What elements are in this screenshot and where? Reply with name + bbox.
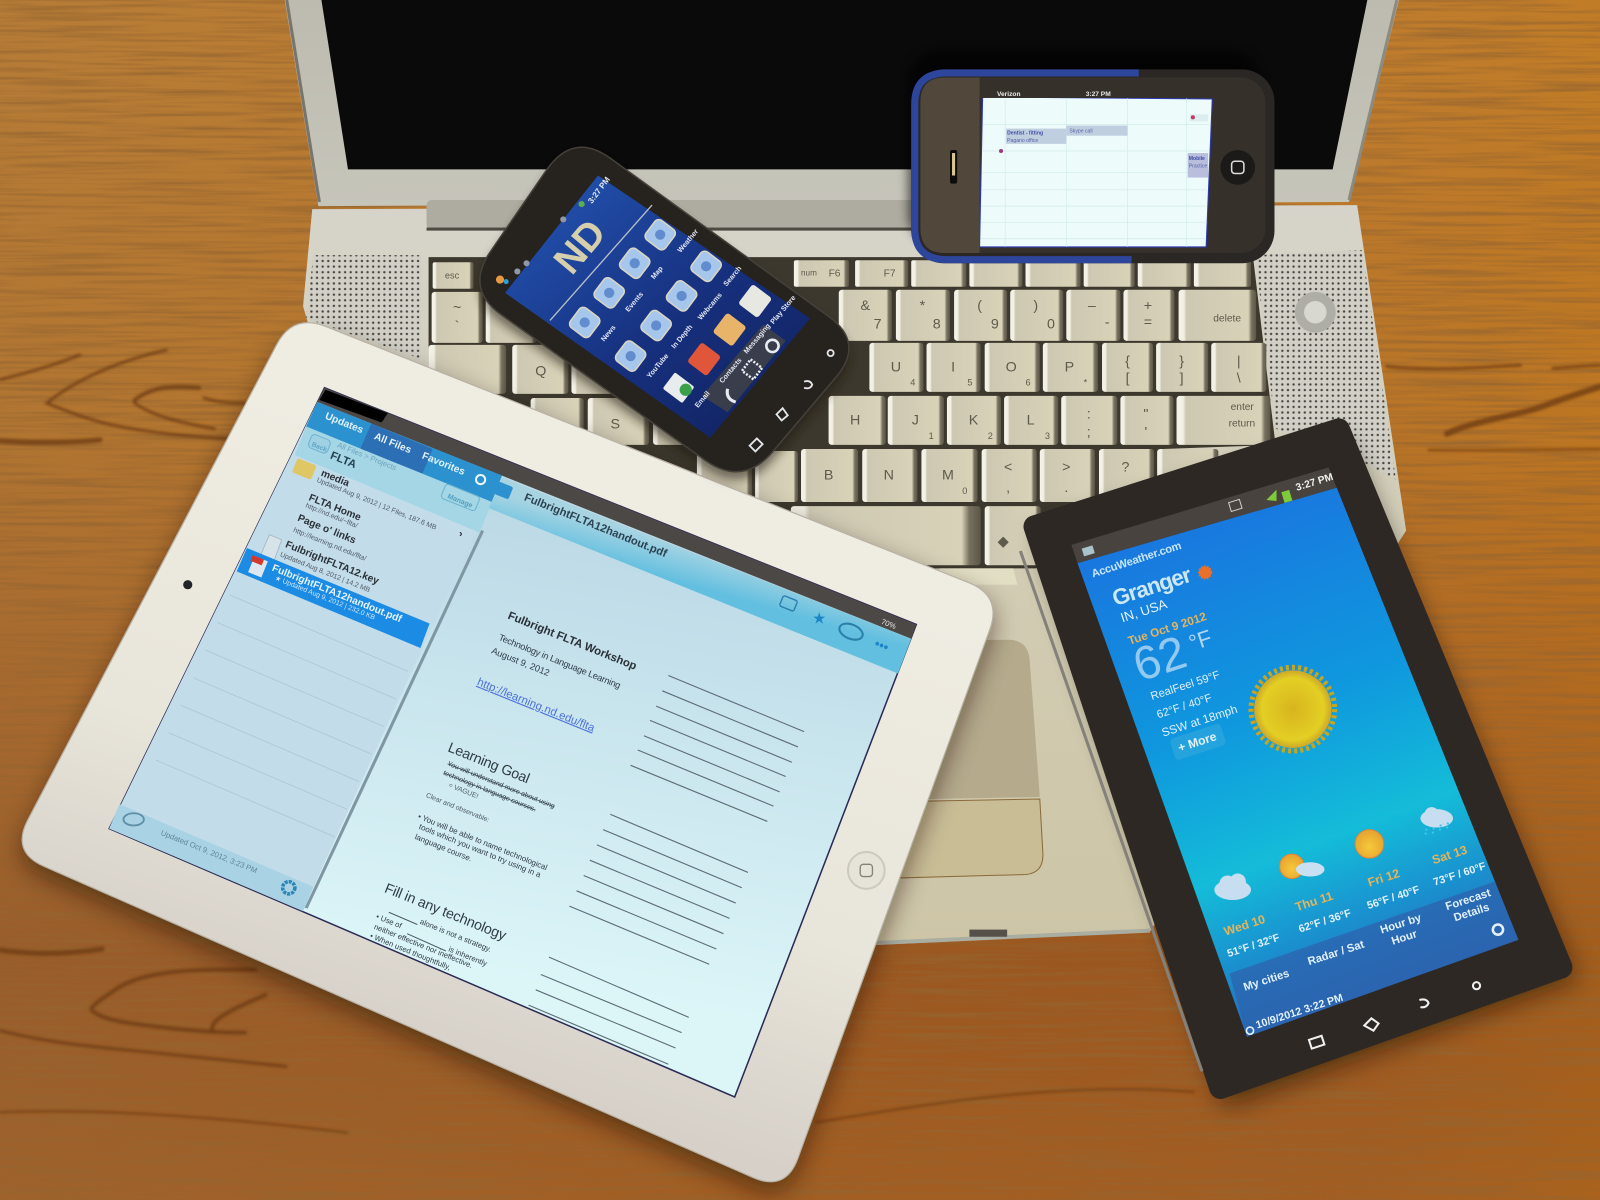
- number key row: –: [1088, 298, 1096, 314]
- file list: FulbrightFLTA12.key: [284, 540, 381, 587]
- bottom letter key row: ?: [1122, 459, 1130, 475]
- number key row: [432, 290, 1256, 343]
- app icons: In Depth: [670, 323, 694, 350]
- document text: Technology in Language Learning: [497, 632, 622, 691]
- bottom menu labels: Radar / Sat: [1306, 939, 1366, 968]
- bottom letter key row: >: [1062, 459, 1070, 475]
- handout writing lines: [529, 676, 804, 1064]
- tab bar: Updates: [323, 411, 365, 436]
- forecast: Sat 13: [1430, 843, 1469, 867]
- current conditions: AccuWeather.com: [1090, 540, 1183, 580]
- Friday sun: [1355, 830, 1384, 858]
- Saturday rain cloud: [1420, 807, 1453, 835]
- status bar: Verizon: [997, 91, 1021, 98]
- ND logo: ND: [546, 212, 615, 282]
- status icons: [496, 175, 612, 284]
- forecast: [1214, 807, 1488, 960]
- number key row: ~: [453, 300, 461, 316]
- current conditions: 62°F / 40°F: [1155, 692, 1213, 721]
- forecast: 62°F / 36°F: [1297, 907, 1353, 936]
- function key row: esc: [445, 271, 460, 281]
- document text: [369, 610, 638, 972]
- document text: August 9, 2012: [490, 646, 551, 678]
- laptop front notch: [969, 930, 1007, 937]
- bottom menu labels: Forecast: [1444, 887, 1493, 913]
- file list: Updated Aug 8, 2012 | 14.2 MB: [279, 551, 371, 594]
- function key row: num: [801, 269, 817, 278]
- folder header: [295, 427, 492, 533]
- app icons: Webcams: [696, 291, 724, 322]
- folder header: FLTA: [328, 450, 358, 471]
- calendar screen: [980, 90, 1212, 247]
- number key row: ): [1033, 298, 1038, 314]
- Android phone shadow: [480, 155, 849, 480]
- calendar events: Practice: [1189, 163, 1207, 169]
- top letter key row: [: [1126, 371, 1130, 387]
- top letter key row: I: [951, 359, 955, 375]
- phone screen: [505, 176, 810, 438]
- home letter key row: enter: [1231, 402, 1254, 413]
- document toolbar: FulbrightFLTA12handout.pdf: [522, 492, 669, 560]
- function key row: [433, 260, 1251, 289]
- forecast: 56°F / 40°F: [1366, 884, 1421, 912]
- Samsung tablet shadow: [1036, 439, 1577, 1107]
- earpiece: [950, 150, 957, 184]
- function key row: F6: [829, 269, 841, 280]
- number key row: =: [1144, 315, 1152, 331]
- document text: is inherently: [447, 945, 489, 968]
- case: [911, 69, 1274, 263]
- calendar grid: [981, 98, 1209, 247]
- forecast: 73°F / 60°F: [1432, 860, 1488, 889]
- app icons: Map: [649, 264, 665, 281]
- number key row: &: [861, 298, 871, 314]
- status bar: [317, 388, 916, 639]
- home letter key row: S: [611, 417, 620, 433]
- app icons: YouTube: [645, 352, 670, 380]
- tablet status strip: [1071, 467, 1337, 563]
- bottom letter key row: <: [1004, 459, 1012, 475]
- wallpaper divider: [550, 205, 652, 320]
- pane footer: [109, 804, 313, 911]
- tab bar: All Files: [372, 431, 413, 456]
- iPad home button: [848, 852, 885, 889]
- home letter key row: 2: [988, 431, 993, 441]
- trackpad: [878, 640, 1040, 800]
- folder header: Back: [310, 441, 328, 454]
- large sun: [1251, 667, 1335, 751]
- document text: Fulbright FLTA Workshop: [506, 610, 638, 673]
- top letter key row: |: [1237, 353, 1241, 369]
- laptop lid: [285, 0, 1399, 206]
- bottom menu labels: My cities: [1242, 968, 1291, 994]
- file list: http://nd.edu/~flta/: [304, 503, 359, 530]
- empty list rows: [156, 595, 408, 837]
- top letter key row: U: [891, 359, 901, 375]
- top letter key row: Q: [535, 364, 546, 380]
- dock band: [702, 324, 786, 412]
- document text: You will understand more about using: [446, 761, 556, 810]
- current conditions: IN, USA: [1119, 596, 1169, 625]
- current conditions: + More: [1176, 729, 1219, 755]
- file list: http://learning.nd.edu/flta/: [292, 527, 367, 563]
- left file pane: [109, 402, 502, 911]
- space bar row: ◆: [998, 534, 1009, 550]
- forecast: Thu 11: [1294, 889, 1335, 914]
- current conditions: °F: [1186, 625, 1215, 656]
- home letter key row: 3: [1045, 431, 1050, 441]
- document text: neither effective nor ineffective.: [373, 922, 474, 970]
- home letter key row: 1: [929, 431, 934, 441]
- document toolbar: [489, 478, 911, 673]
- app icons: Search: [722, 265, 743, 288]
- current conditions: RealFeel 59°F: [1149, 669, 1221, 703]
- app icons: News: [599, 324, 618, 343]
- pane divider: [306, 531, 483, 908]
- iPad screen: [109, 388, 916, 1097]
- number key row: +: [1144, 298, 1152, 314]
- home button: [1220, 150, 1255, 185]
- weather screen: [1078, 488, 1518, 1037]
- app icons: Email: [693, 390, 712, 409]
- left speaker grille: [306, 255, 421, 359]
- document toolbar: •••: [872, 636, 891, 655]
- tab bar: Favorites: [420, 451, 467, 478]
- file list: media: [319, 468, 351, 489]
- iPhone shadow: [908, 51, 1260, 245]
- document text: • You will be able to name technological: [417, 812, 549, 872]
- power button: [1295, 292, 1336, 333]
- calendar events: [999, 114, 1208, 178]
- forecast: Fri 12: [1366, 866, 1402, 890]
- app icons: Weather: [676, 228, 700, 254]
- document text: • When used thoughtfully,: [369, 931, 452, 972]
- document text: tools which you want to try using in a: [418, 822, 543, 880]
- app icons: Messaging: [742, 322, 772, 355]
- home letter key row: ;: [1087, 425, 1091, 441]
- iPad shadow: [22, 337, 993, 1192]
- document text: http://learning.nd.edu/flta: [475, 676, 597, 735]
- home letter key row: L: [1027, 412, 1035, 428]
- document text: Fill in any technology: [382, 881, 509, 944]
- laptop: [285, 0, 1406, 946]
- calendar events: Dentist - fitting: [1007, 131, 1043, 137]
- document text: Learning Goal: [445, 740, 532, 787]
- phone navigation keys: [750, 350, 834, 451]
- Wednesday cloud: [1214, 873, 1251, 900]
- pane footer: Updated Oct 9, 2012, 3:23 PM: [159, 828, 259, 875]
- palm rest highlight: [934, 568, 1017, 585]
- iPad camera: [183, 580, 192, 589]
- top letter key row: {: [1125, 353, 1130, 369]
- calendar events: Mobile: [1189, 156, 1205, 162]
- phone face: [920, 78, 1265, 253]
- current conditions: [1090, 540, 1239, 761]
- bottom menu labels: 10/9/2012 3:22 PM: [1254, 992, 1345, 1031]
- status bar: [982, 90, 1212, 98]
- number key row: 9: [991, 317, 999, 333]
- top letter key row: P: [1065, 359, 1074, 375]
- top letter key row: \: [1237, 371, 1241, 387]
- top letter key row: 6: [1026, 378, 1031, 388]
- document text: technology in language courses.: [442, 770, 537, 814]
- number key row: (: [977, 298, 982, 314]
- top letter key row: O: [1006, 359, 1017, 375]
- bottom letter key row: N: [884, 468, 894, 484]
- document toolbar: ★: [812, 610, 826, 627]
- file list: FLTA Home: [307, 493, 363, 524]
- hinge: [427, 200, 998, 230]
- current conditions: 62: [1127, 626, 1193, 691]
- calendar events: Pagano office: [1007, 138, 1038, 144]
- home letter key row: [531, 396, 1270, 445]
- app icons: Contacts: [718, 356, 744, 385]
- home letter key row: J: [912, 412, 919, 428]
- bottom menu labels: Hour by: [1379, 912, 1424, 937]
- right speaker grille: [1255, 250, 1396, 480]
- forecast: Wed 10: [1222, 912, 1267, 939]
- status icons: 3:27 PM: [586, 175, 612, 205]
- bottom letter key row: M: [942, 468, 954, 484]
- bottom letter key row: [697, 449, 1218, 502]
- file list: Page o' links: [296, 513, 358, 546]
- top letter key row: }: [1179, 353, 1184, 369]
- top letter key row: ]: [1180, 371, 1184, 387]
- bottom menu labels: Details: [1452, 901, 1491, 924]
- top letter key row: *: [1084, 378, 1088, 388]
- home letter key row: :: [1087, 406, 1091, 422]
- bottom menu labels: Hour: [1390, 928, 1419, 948]
- phone body: [480, 147, 849, 472]
- bottom menu labels: [1242, 887, 1503, 1034]
- document text: Clear and observable:: [425, 792, 490, 824]
- top letter key row: [429, 343, 1266, 394]
- tablet side edge: [1020, 551, 1202, 1071]
- app icons: Play Store: [769, 294, 797, 326]
- small sun icon: [1199, 566, 1211, 579]
- bottom navigation band: [1230, 882, 1518, 1037]
- space bar row: [791, 506, 1041, 565]
- app icons: Events: [624, 290, 645, 314]
- home letter key row: return: [1229, 419, 1255, 430]
- number key row: 7: [874, 317, 882, 333]
- number key row: -: [1105, 315, 1110, 331]
- tablet navigation keys: [1309, 982, 1480, 1049]
- home letter key row: K: [969, 412, 979, 428]
- folder header: All Files > Projects: [336, 440, 398, 472]
- tab bar: [306, 402, 502, 502]
- tablet status strip: 3:27 PM: [1295, 472, 1335, 494]
- iPad body: [22, 323, 993, 1182]
- home letter key row: ': [1145, 425, 1147, 441]
- status bar: 70%: [880, 617, 898, 631]
- number key row: *: [920, 298, 926, 314]
- document text: language course.: [414, 832, 473, 863]
- tablet body: [1035, 430, 1561, 1088]
- bottom letter key row: 0: [962, 486, 967, 496]
- Android smartphone: [480, 147, 849, 472]
- document text: alone is not a strategy.: [419, 917, 493, 954]
- dock icons: [727, 340, 779, 402]
- iPad tablet with file viewer: [22, 323, 993, 1182]
- keyboard: [429, 257, 1276, 568]
- trackpad button: [878, 799, 1043, 879]
- calendar events: Skype call: [1069, 129, 1093, 135]
- laptop base: [303, 205, 1406, 946]
- iPhone in blue case: [911, 69, 1274, 263]
- selected file row: [237, 548, 430, 648]
- file list: ›: [459, 529, 463, 540]
- top letter key row: 5: [967, 378, 972, 388]
- selected file row: FulbrightFLTA12handout.pdf: [270, 563, 404, 625]
- top letter key row: 4: [910, 378, 915, 388]
- app icons: [568, 218, 797, 409]
- document text: = VAGUE!: [447, 782, 479, 800]
- number key row: `: [455, 319, 460, 335]
- bottom letter key row: B: [824, 468, 833, 484]
- bottom letter key row: ,: [1006, 480, 1010, 496]
- file list: [260, 458, 480, 594]
- Thursday sun and cloud: [1280, 854, 1324, 879]
- current conditions: Tue Oct 9 2012: [1127, 610, 1209, 648]
- home letter key row: H: [850, 412, 860, 428]
- forecast: 51°F / 32°F: [1226, 932, 1282, 960]
- selected file row: ★ Updated Aug 9, 2012 | 232.0 KB: [274, 574, 377, 622]
- number key row: 8: [933, 317, 941, 333]
- file list: Updated Aug 9, 2012 | 12 Files, 187.6 MB: [316, 477, 438, 532]
- function key row: F7: [884, 269, 896, 280]
- current conditions: SSW at 18mph: [1160, 703, 1239, 740]
- Android tablet with weather app: [1020, 430, 1561, 1088]
- number key row: 0: [1047, 317, 1055, 333]
- file list: Manage: [446, 492, 474, 510]
- current conditions: Granger: [1109, 562, 1195, 611]
- document text: • Use of: [375, 912, 404, 931]
- home letter key row: ": [1143, 406, 1148, 422]
- status bar: 3:27 PM: [1086, 91, 1111, 98]
- bottom letter key row: .: [1064, 480, 1068, 496]
- number key row: delete: [1213, 313, 1241, 324]
